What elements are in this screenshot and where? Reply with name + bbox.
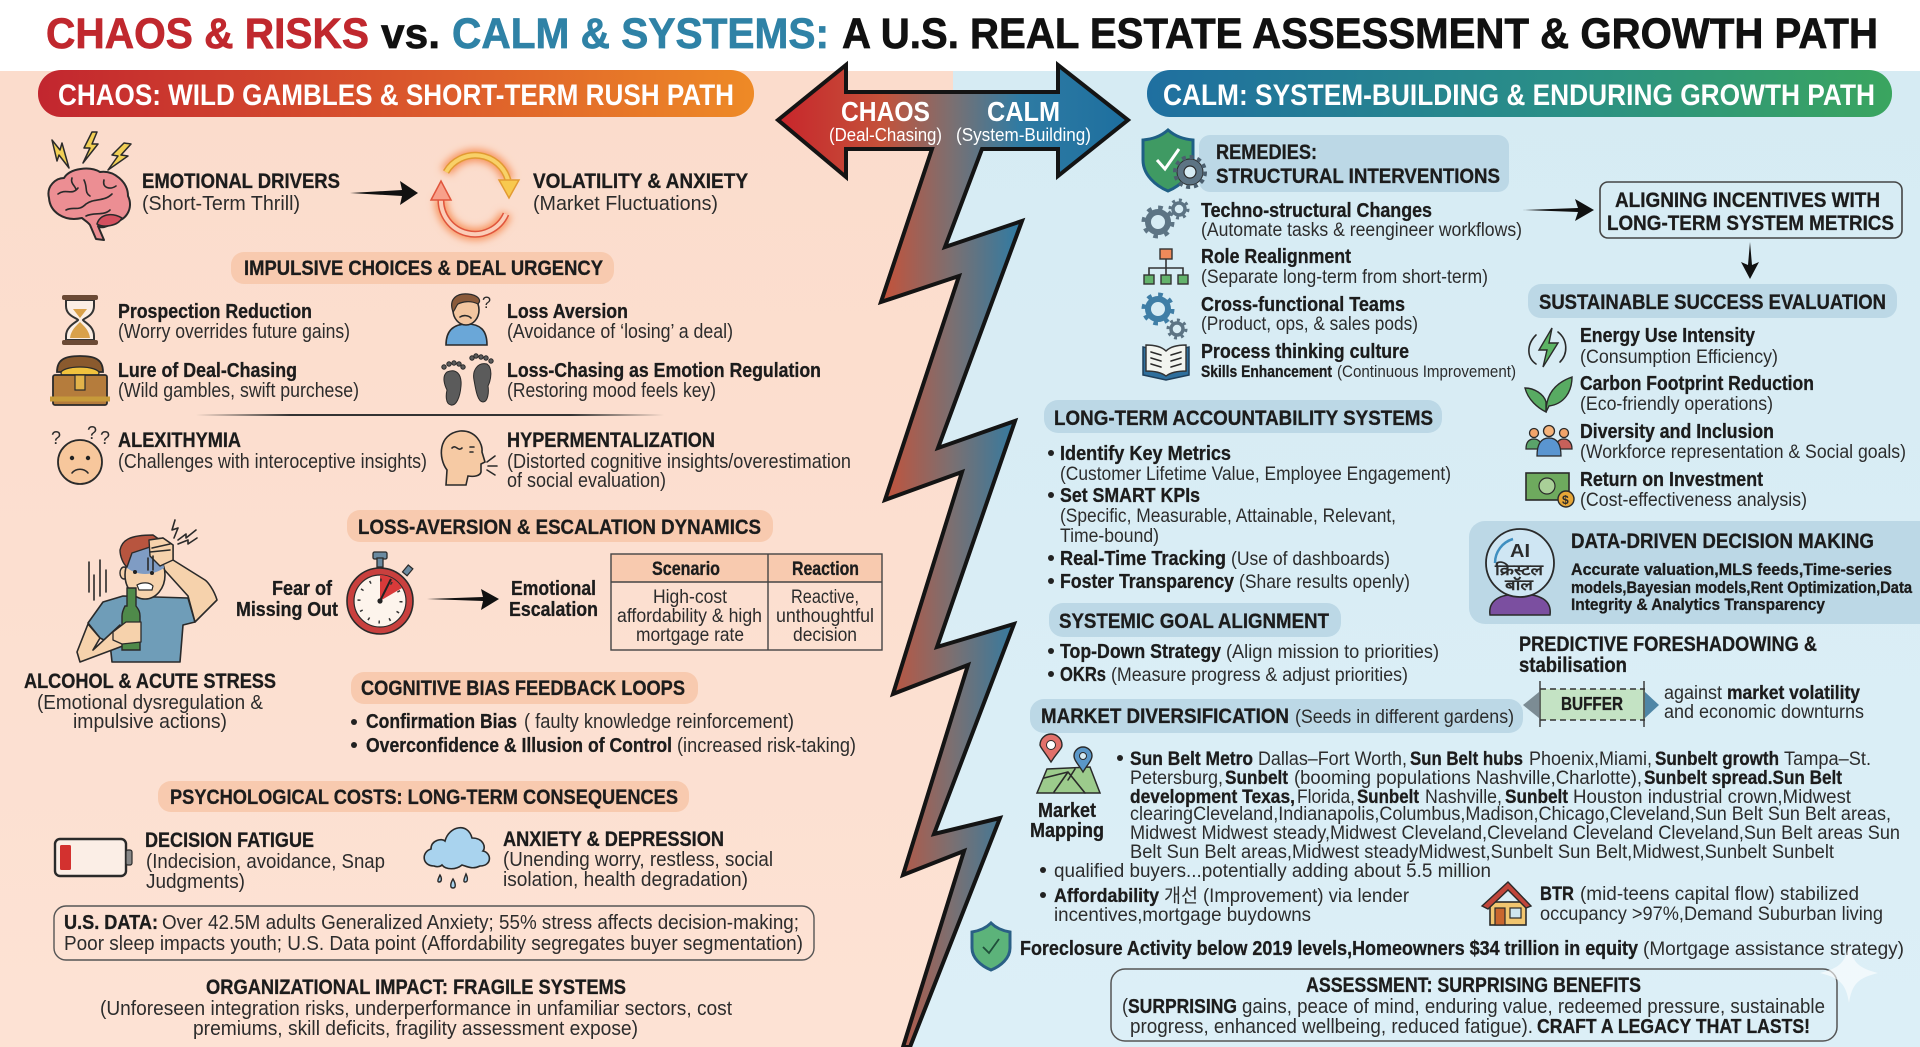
- text: sun belt and midwest markets: Sunbelt: [1225, 768, 1289, 789]
- text: sun belt and midwest markets: (booming populations Nashville,Charlotte),: [1294, 768, 1642, 789]
- icon: crystal ball: AI: [1510, 541, 1530, 561]
- icon: leaves: [1525, 377, 1572, 412]
- text: foreclosure activity: (Mortgage assistance strategy): [1643, 939, 1904, 960]
- arrow label: calm: CALM: [987, 96, 1060, 127]
- text: decision fatigue: DECISION FATIGUE: [145, 829, 314, 852]
- text: affordability: 개선: [1164, 885, 1198, 907]
- table: scenario and reaction: Reaction: [792, 559, 859, 580]
- heading: impulsive choices: IMPULSIVE CHOICES & DEAL URGENCY: [244, 257, 603, 280]
- icon: stressed man with bottle: [77, 520, 217, 662]
- text: sun belt and midwest markets: Belt Sun Belt areas,Midwest steadyMidwest,Sunbelt Sun Belt,Midwest,Sunbelt Sunbelt: [1130, 842, 1835, 863]
- callout: assessment benefits: CRAFT A LEGACY THAT LASTS!: [1537, 1016, 1810, 1038]
- icon: confused face: [51, 423, 110, 484]
- icon: people: [1526, 426, 1572, 456]
- text: carbon footprint: Carbon Footprint Reduction: [1580, 373, 1814, 395]
- text: sun belt and midwest markets: Nashville,: [1425, 787, 1502, 808]
- icon: hourglass: [62, 295, 98, 345]
- arrow: fomo to escalation: [427, 589, 499, 610]
- text: sun belt and midwest markets: Sun Belt Metro: [1130, 749, 1253, 770]
- callout: assessment benefits: [1111, 969, 1837, 1041]
- icon: worried person: ?: [482, 293, 491, 312]
- list: goal alignment: [1048, 641, 1439, 686]
- arrow: techno-structural to incentives: [1523, 199, 1594, 221]
- title: CALM & SYSTEMS:: [452, 10, 829, 58]
- text: prospection reduction: (Worry overrides future gains): [118, 321, 350, 343]
- list: accountability steps: Identify Key Metrics: [1060, 443, 1231, 465]
- heading: impulsive choices: [231, 252, 614, 284]
- text: affordability: Affordability: [1054, 886, 1159, 907]
- text: cross-functional teams: Cross-functional Teams: [1201, 294, 1405, 316]
- text: build-to-rent: occupancy >97%,Demand Suburban living: [1540, 904, 1883, 925]
- icon: buffer: BUFFER: [1561, 694, 1623, 714]
- text: prospection reduction: Prospection Reduction: [118, 301, 312, 323]
- text: anxiety and depression: isolation, health degradation): [503, 869, 748, 891]
- text: organizational impact: (Unforeseen integration risks, underperformance in unfamiliar sectors, cost: [100, 998, 732, 1020]
- icon: crystal ball: बॉल: [1504, 576, 1534, 594]
- icon: foreclosure shield: [972, 923, 1010, 970]
- heading: chaos path: [38, 70, 754, 117]
- list: goal alignment: OKRs: [1060, 664, 1106, 686]
- heading: calm path: [1147, 70, 1892, 117]
- callout: U.S. data: Poor sleep impacts youth; U.S. Data point (Affordability segregates buyer segmentation): [64, 933, 803, 955]
- text: organizational impact: [100, 976, 732, 1040]
- text: fear of missing out: Missing Out: [236, 599, 338, 621]
- heading: long-term accountability: LONG-TERM ACCOUNTABILITY SYSTEMS: [1054, 407, 1433, 430]
- icon: worried person: [446, 293, 491, 345]
- text: sun belt and midwest markets: Sunbelt: [1357, 787, 1420, 808]
- arrow: drivers to volatility: [350, 181, 418, 205]
- text: sun belt and midwest markets: Sunbelt growth: [1655, 749, 1779, 770]
- text: qualified buyers: qualified buyers...potentially adding about 5.5 million: [1054, 861, 1491, 882]
- text: sun belt and midwest markets: Phoenix,Miami,: [1529, 749, 1652, 770]
- table: scenario and reaction: Scenario: [652, 559, 720, 580]
- text: process thinking culture: Process thinking culture: [1201, 341, 1409, 363]
- text: sun belt and midwest markets: Petersburg,: [1130, 768, 1223, 789]
- callout: U.S. data: [54, 906, 814, 960]
- arrow: incentives to evaluation: [1741, 242, 1759, 279]
- text: emotional drivers: [142, 170, 340, 215]
- text: energy use intensity: Energy Use Intensity: [1580, 325, 1756, 347]
- panel: chaos path: [24, 70, 882, 1040]
- table: scenario and reaction: unthoughtful: [776, 606, 874, 627]
- heading: predictive foreshadowing: PREDICTIVE FORESHADOWING &: [1519, 633, 1817, 656]
- text: sun belt and midwest markets: Midwest Midwest steady,Midwest Cleveland,Cleveland Cleveland Cleveland,Sun Belt areas Sun: [1130, 823, 1900, 844]
- icon: buffer: [1523, 681, 1659, 727]
- text: hypermentalization: (Distorted cognitive insights/overestimation: [507, 451, 851, 473]
- icon: energy bolt: [1529, 328, 1566, 367]
- heading: long-term accountability: [1044, 400, 1442, 433]
- title: A U.S. REAL ESTATE ASSESSMENT & GROWTH PATH: [842, 10, 1878, 58]
- text: decision fatigue: Judgments): [146, 871, 245, 893]
- icon: gears: [1144, 200, 1188, 236]
- icon: confused face: ?: [100, 428, 110, 448]
- heading: remedies: STRUCTURAL INTERVENTIONS: [1216, 165, 1500, 188]
- text: alexithymia: (Challenges with interoceptive insights): [118, 451, 427, 473]
- text: organizational impact: premiums, skill deficits, fragility assessment expose): [193, 1018, 638, 1040]
- callout: U.S. data: Over 42.5M adults Generalized Anxiety; 55% stress affects decision-making;: [162, 912, 799, 934]
- text: emotional escalation: Escalation: [509, 599, 598, 621]
- text: carbon footprint: (Eco-friendly operations): [1580, 394, 1773, 415]
- table: scenario and reaction: mortgage rate: [636, 625, 744, 646]
- list: cognitive biases: Overconfidence & Illusion of Control: [366, 735, 672, 757]
- heading: systemic goal alignment: SYSTEMIC GOAL ALIGNMENT: [1059, 610, 1329, 633]
- text: techno-structural changes: Techno-structural Changes: [1201, 200, 1432, 222]
- icon: market map: [1037, 734, 1100, 793]
- text: hypermentalization: HYPERMENTALIZATION: [507, 429, 715, 452]
- title: [46, 10, 1878, 58]
- heading: loss-aversion: LOSS-AVERSION & ESCALATION DYNAMICS: [358, 516, 761, 539]
- heading: predictive foreshadowing: stabilisation: [1519, 654, 1627, 677]
- text: anxiety and depression: (Unending worry, restless, social: [503, 849, 773, 871]
- callout: assessment benefits: SURPRISING: [1128, 996, 1237, 1018]
- table: scenario and reaction: [611, 554, 882, 650]
- text: sun belt and midwest markets: clearingCleveland,Indianapolis,Columbus,Madison,Chicago,Cleveland,Sun Belt Sun Belt areas,: [1130, 804, 1891, 825]
- heading: predictive foreshadowing: [1519, 633, 1817, 677]
- text: sun belt and midwest markets: Sunbelt spread.Sun Belt: [1644, 768, 1843, 789]
- icon: volatility cycle: [431, 155, 519, 234]
- icon: confused face: ?: [87, 423, 97, 443]
- text: anxiety and depression: ANXIETY & DEPRESSION: [503, 828, 724, 851]
- text: loss aversion: Loss Aversion: [507, 301, 628, 323]
- text: volatility and anxiety: [533, 170, 748, 215]
- central chaos-calm arrow and lightning bolt: [778, 65, 1128, 1047]
- text: build-to-rent: (mid-teens capital flow) stabilized: [1580, 884, 1859, 905]
- text: volatility and anxiety: VOLATILITY & ANXIETY: [533, 170, 748, 193]
- text: build-to-rent: [1540, 884, 1883, 925]
- list: accountability steps: Real-Time Tracking: [1060, 548, 1226, 570]
- text: loss-chasing: [507, 360, 821, 402]
- text: anxiety and depression: [503, 828, 773, 891]
- text: sun belt and midwest markets: [1117, 749, 1900, 863]
- heading: psychological costs: PSYCHOLOGICAL COSTS: LONG-TERM CONSEQUENCES: [170, 786, 678, 809]
- text: volatility and anxiety: (Market Fluctuations): [533, 193, 718, 215]
- heading: remedies: [1199, 135, 1509, 192]
- icon: rain cloud: [424, 828, 489, 888]
- text: process thinking culture: Skills Enhancement: [1201, 362, 1332, 381]
- list: cognitive biases: ( faulty knowledge reinforcement): [524, 711, 794, 733]
- text: loss-chasing: (Restoring mood feels key): [507, 380, 716, 402]
- text: sun belt and midwest markets: Sun Belt hubs: [1410, 749, 1523, 770]
- icon: brain with lightning: [48, 132, 131, 240]
- list: accountability steps: [1048, 443, 1451, 593]
- icon: confused face: ?: [51, 428, 61, 448]
- callout: U.S. data: U.S. DATA:: [64, 912, 158, 934]
- text: hypermentalization: of social evaluation): [507, 470, 666, 492]
- text: hypermentalization: [507, 429, 851, 492]
- text: affordability: (Improvement) via lender: [1203, 886, 1410, 907]
- text: role realignment: Role Realignment: [1201, 246, 1351, 268]
- text: return on investment: [1580, 469, 1807, 511]
- icon: stopwatch: [347, 552, 413, 634]
- text: loss aversion: (Avoidance of ‘losing’ a deal): [507, 321, 733, 343]
- arrow sublabel: deal-chasing: (Deal-Chasing): [829, 125, 942, 145]
- heading: cognitive bias: COGNITIVE BIAS FEEDBACK LOOPS: [361, 677, 685, 700]
- text: against volatility: market volatility: [1727, 683, 1860, 704]
- icon: house: [1482, 882, 1531, 925]
- icon: crystal ball: क्रिस्टल: [1494, 561, 1544, 579]
- heading: market diversification: (Seeds in different gardens): [1295, 707, 1514, 728]
- text: decision fatigue: (Indecision, avoidance, Snap: [146, 851, 385, 873]
- text: cross-functional teams: (Product, ops, & sales pods): [1201, 314, 1418, 335]
- text: decision fatigue: [145, 829, 385, 893]
- text: organizational impact: ORGANIZATIONAL IMPACT: FRAGILE SYSTEMS: [206, 976, 626, 999]
- callout: assessment benefits: progress, enhanced wellbeing, reduced fatigue).: [1130, 1016, 1533, 1038]
- heading: cognitive bias: [351, 672, 698, 704]
- icon: org chart: [1144, 249, 1188, 284]
- text: alexithymia: [118, 429, 427, 473]
- panel: calm path: [972, 70, 1920, 1041]
- text: affordability: incentives,mortgage buydowns: [1054, 905, 1311, 926]
- text: sun belt and midwest markets: Florida,: [1297, 787, 1355, 808]
- text: emotional drivers: EMOTIONAL DRIVERS: [142, 170, 340, 193]
- text: alcohol and acute stress: [24, 670, 276, 733]
- text: loss-chasing: Loss-Chasing as Emotion Regulation: [507, 360, 821, 382]
- icon: sparkle watermark: [1820, 943, 1878, 1003]
- arrow label: chaos: CHAOS: [841, 96, 930, 127]
- text: sun belt and midwest markets: Tampa–St.: [1784, 749, 1871, 770]
- text: sun belt and midwest markets: development Texas,: [1130, 787, 1295, 808]
- heading: systemic goal alignment: [1049, 603, 1341, 637]
- text: energy use intensity: [1580, 325, 1778, 368]
- title: CHAOS & RISKS: [46, 10, 369, 58]
- text: against volatility: against: [1664, 683, 1723, 704]
- text: fear of missing out: Fear of: [272, 578, 332, 600]
- text: emotional escalation: [509, 578, 598, 621]
- text: techno-structural changes: [1201, 200, 1522, 241]
- list: accountability steps: (Specific, Measurable, Attainable, Relevant,: [1060, 506, 1396, 527]
- heading: data-driven: DATA-DRIVEN DECISION MAKING: [1571, 530, 1874, 553]
- table: scenario and reaction: High-cost: [653, 587, 728, 608]
- icon: footprints: [442, 354, 493, 405]
- text: process thinking culture: (Continuous Improvement): [1337, 362, 1516, 381]
- text: foreclosure activity: Foreclosure Activity below 2019 levels,Homeowners $34 trillion in equity: [1020, 938, 1639, 960]
- text: affordability: [1040, 885, 1410, 926]
- heading: loss-aversion: [347, 510, 773, 542]
- text: sun belt and midwest markets: Dallas–Fort Worth,: [1258, 749, 1407, 770]
- icon: low battery: [55, 839, 132, 876]
- icon: head profile: [441, 431, 497, 485]
- list: cognitive biases: (increased risk-taking): [677, 735, 856, 757]
- text: sun belt and midwest markets: Sunbelt: [1505, 787, 1569, 808]
- text: diversity and inclusion: [1580, 421, 1906, 463]
- callout: aligning incentives: [1600, 182, 1902, 238]
- text: diversity and inclusion: Diversity and Inclusion: [1580, 421, 1774, 443]
- list: cognitive biases: Confirmation Bias: [366, 711, 517, 733]
- text: build-to-rent: BTR: [1540, 884, 1574, 905]
- list: accountability steps: Set SMART KPIs: [1060, 485, 1200, 507]
- heading: psychological costs: [158, 781, 689, 812]
- text: against volatility: and economic downturns: [1664, 702, 1864, 723]
- icon: money: $: [1562, 493, 1569, 507]
- callout: assessment benefits: (: [1122, 996, 1128, 1018]
- icon: crystal ball: [1486, 529, 1554, 615]
- list: goal alignment: (Measure progress & adjust priorities): [1111, 665, 1408, 686]
- list: goal alignment: Top-Down Strategy: [1060, 641, 1222, 663]
- text: process thinking culture: [1201, 341, 1516, 381]
- text: lure of deal-chasing: Lure of Deal-Chasing: [118, 360, 297, 382]
- list: accountability steps: Time-bound): [1060, 526, 1159, 547]
- heading: chaos path: CHAOS: WILD GAMBLES & SHORT-TERM RUSH PATH: [58, 79, 734, 112]
- icon: treasure chest: [50, 356, 110, 405]
- text: techno-structural changes: (Automate tasks & reengineer workflows): [1201, 220, 1522, 241]
- list: accountability steps: (Use of dashboards): [1231, 549, 1390, 570]
- text: return on investment: Return on Investment: [1580, 469, 1763, 491]
- text: lure of deal-chasing: [118, 360, 359, 402]
- text: return on investment: (Cost-effectiveness analysis): [1580, 490, 1807, 511]
- text: emotional drivers: (Short-Term Thrill): [142, 193, 300, 215]
- text: data-driven detail: Accurate valuation,MLS feeds,Time-series: [1571, 560, 1892, 579]
- heading: remedies: REMEDIES:: [1216, 141, 1317, 164]
- text: alcohol and acute stress: impulsive actions): [73, 711, 227, 733]
- text: alexithymia: ALEXITHYMIA: [118, 429, 241, 452]
- text: data-driven detail: [1571, 560, 1912, 614]
- callout: aligning incentives: ALIGNING INCENTIVES WITH: [1615, 189, 1880, 212]
- icon: shield with gear: [1143, 130, 1205, 191]
- text: alcohol and acute stress: ALCOHOL & ACUTE STRESS: [24, 670, 276, 693]
- table: scenario and reaction: Reactive,: [791, 587, 859, 608]
- icon: team gears: [1144, 295, 1186, 338]
- heading: market diversification: MARKET DIVERSIFICATION: [1041, 705, 1289, 728]
- list: accountability steps: Foster Transparency: [1060, 571, 1235, 593]
- heading: sustainable success: [1528, 284, 1897, 318]
- text: fear of missing out: [236, 578, 338, 621]
- text: role realignment: [1201, 246, 1488, 288]
- text: alcohol and acute stress: (Emotional dysregulation &: [37, 692, 264, 714]
- list: cognitive biases: [351, 711, 856, 757]
- text: lure of deal-chasing: (Wild gambles, swift purchese): [118, 380, 359, 402]
- list: goal alignment: (Align mission to priorities): [1226, 642, 1439, 663]
- callout: assessment benefits: ASSESSMENT: SURPRISING BENEFITS: [1306, 974, 1641, 997]
- text: loss aversion: [507, 301, 733, 343]
- label: market mapping: [1030, 800, 1104, 842]
- text: energy use intensity: (Consumption Efficiency): [1580, 347, 1778, 368]
- table: scenario and reaction: affordability & high: [617, 606, 762, 627]
- text: cross-functional teams: [1201, 294, 1418, 335]
- text: carbon footprint: [1580, 373, 1814, 415]
- panel: data-driven decision making: [1469, 521, 1920, 624]
- text: role realignment: (Separate long-term from short-term): [1201, 267, 1488, 288]
- background: chaos panel: [0, 71, 968, 1047]
- icon: money: [1526, 473, 1574, 507]
- text: emotional escalation: Emotional: [511, 578, 596, 600]
- callout: assessment benefits: gains, peace of mind, enduring value, redeemed pressure, sustainable: [1242, 996, 1825, 1018]
- text: prospection reduction: [118, 301, 350, 343]
- text: data-driven detail: Integrity & Analytics Transparency: [1571, 595, 1825, 614]
- icon: book: [1143, 345, 1189, 380]
- background: white header band: [0, 0, 1920, 71]
- arrow sublabel: system-building: (System-Building): [956, 125, 1091, 145]
- title: vs.: [381, 10, 440, 58]
- list: accountability steps: (Customer Lifetime Value, Employee Engagement): [1060, 464, 1451, 485]
- text: against volatility: [1664, 683, 1864, 723]
- list: accountability steps: (Share results openly): [1239, 572, 1410, 593]
- table: scenario and reaction: decision: [793, 625, 857, 646]
- label: market mapping: Market: [1038, 800, 1096, 822]
- label: market mapping: Mapping: [1030, 820, 1104, 842]
- heading: market diversification: [1030, 699, 1523, 733]
- callout: aligning incentives: LONG-TERM SYSTEM METRICS: [1607, 212, 1894, 235]
- text: sun belt and midwest markets: Houston industrial crown,Midwest: [1573, 787, 1852, 808]
